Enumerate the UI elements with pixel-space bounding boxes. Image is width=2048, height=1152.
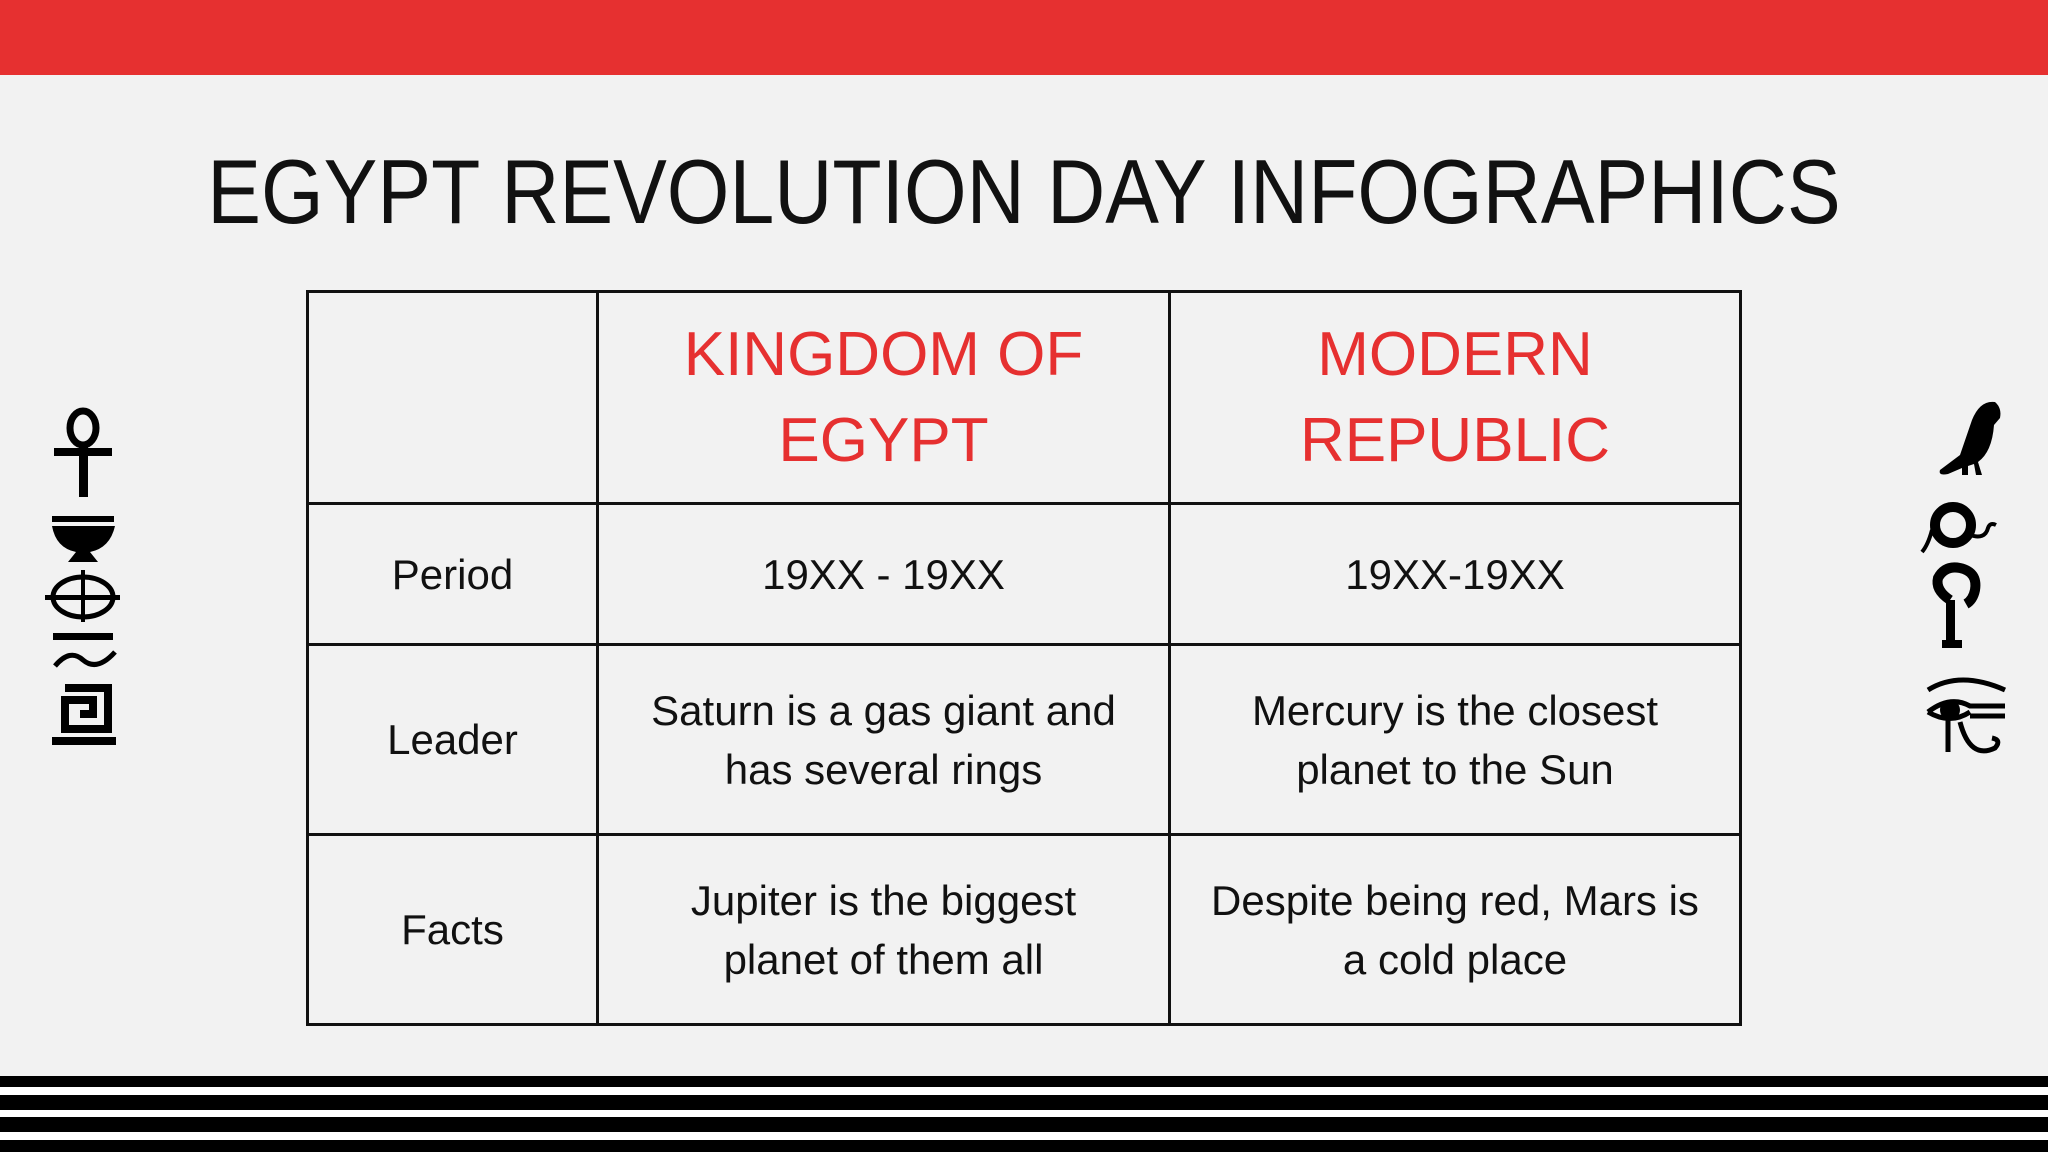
comparison table: Saturn is a gas giant and bbox=[651, 686, 1116, 734]
icons: left hieroglyphs bbox=[45, 408, 120, 745]
title: EGYPT REVOLUTION DAY INFOGRAPHICS bbox=[207, 142, 1841, 243]
icon: bird bbox=[1940, 402, 2000, 475]
top red bar bbox=[0, 0, 2048, 75]
icon: bowl bbox=[52, 516, 115, 562]
comparison table: Mercury is the closest bbox=[1252, 686, 1658, 734]
icon: snake circle bbox=[1922, 507, 1996, 552]
icon: bars and wave bbox=[52, 633, 116, 745]
comparison table: REPUBLIC bbox=[1300, 406, 1610, 474]
comparison table: a cold place bbox=[1343, 936, 1567, 982]
comparison table: planet of them all bbox=[724, 936, 1043, 982]
comparison table: MODERN bbox=[1317, 320, 1593, 388]
comparison table: Leader bbox=[387, 716, 518, 763]
icon: oval bbox=[45, 570, 120, 622]
icon: ankh bbox=[54, 411, 112, 497]
bottom stripes bbox=[0, 1076, 2048, 1152]
comparison table: has several rings bbox=[725, 746, 1042, 792]
comparison table: Facts bbox=[401, 906, 504, 953]
icon: eye of horus bbox=[1928, 680, 2005, 752]
comparison table: 19XX - 19XX bbox=[762, 550, 1005, 598]
comparison table: EGYPT bbox=[778, 406, 989, 474]
comparison table: planet to the Sun bbox=[1296, 746, 1614, 792]
comparison table: Jupiter is the biggest bbox=[691, 876, 1076, 924]
icons: right hieroglyphs bbox=[1920, 402, 2006, 754]
comparison table: 19XX-19XX bbox=[1345, 550, 1565, 598]
icon: crook bbox=[1938, 567, 1975, 648]
comparison table bbox=[306, 290, 1742, 1026]
comparison table: Period bbox=[392, 550, 513, 598]
comparison table: Despite being red, Mars is bbox=[1211, 876, 1699, 924]
comparison table: KINGDOM OF bbox=[684, 320, 1083, 388]
